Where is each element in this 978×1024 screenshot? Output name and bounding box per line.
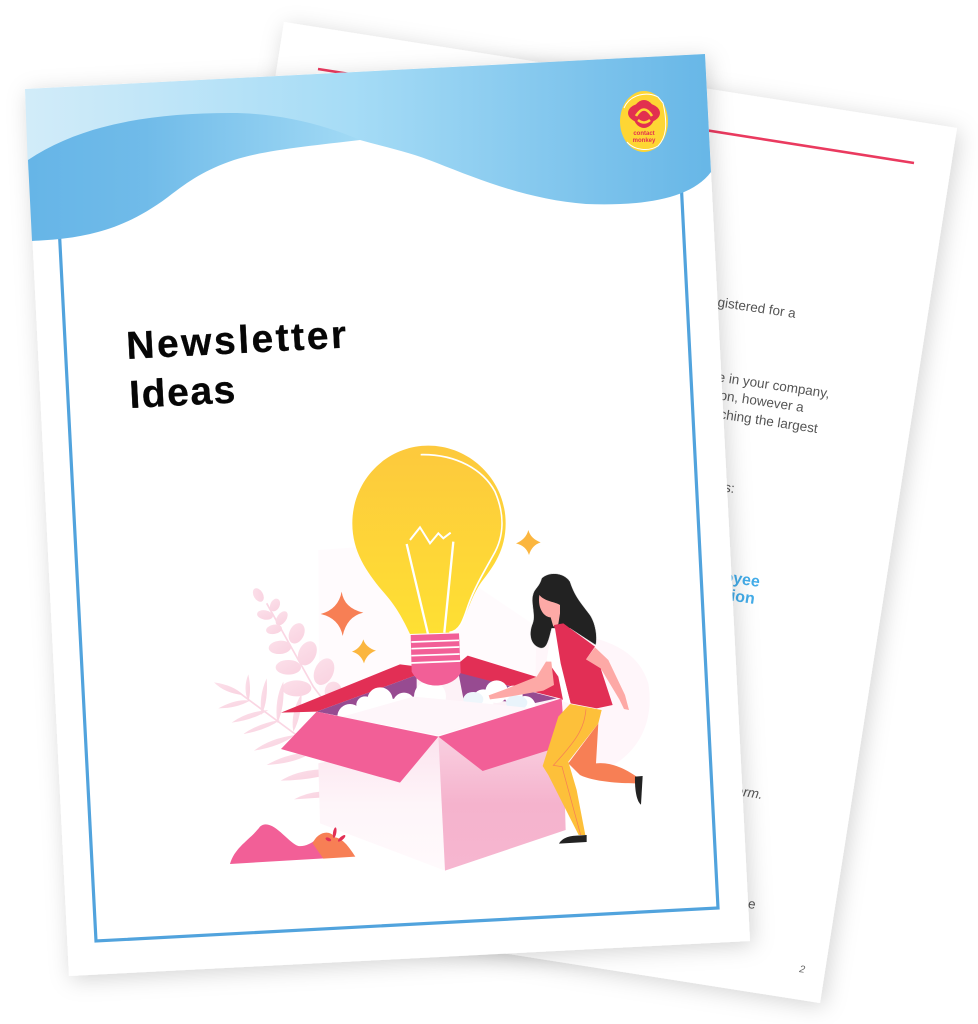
panel: front cover page — [25, 54, 750, 976]
plant leaves — [214, 586, 342, 799]
box right face — [438, 737, 566, 871]
text block: back page paragraphs: reaching the largest — [699, 404, 819, 436]
lightbulb glass — [352, 446, 506, 634]
panel: back page — [147, 22, 957, 1003]
woman: near arm — [489, 662, 554, 699]
box back flaps: red — [281, 664, 417, 713]
woman: shoes — [635, 776, 643, 805]
header rule: back page — [318, 69, 914, 163]
clouds — [337, 680, 536, 729]
heading: back page blue section — [667, 563, 761, 608]
logo: wordmark — [633, 131, 656, 144]
box inner: purple — [317, 675, 417, 716]
woman: shirt — [554, 623, 613, 708]
bulb filament — [407, 527, 453, 634]
logo: contact monkey badge — [620, 91, 668, 152]
cover border frame — [59, 180, 718, 941]
woman figure — [489, 574, 643, 844]
mound with plant — [230, 824, 324, 864]
woman: hair — [530, 574, 596, 648]
background blob — [318, 543, 610, 823]
title: Newsletter — [125, 314, 347, 368]
woman: far arm — [586, 647, 629, 710]
heading: back page blue section: recognition — [667, 578, 756, 608]
box interior — [317, 673, 562, 735]
text block: back page paragraphs: ideas: — [698, 476, 736, 496]
text block: back page paragraphs: You have registered for a — [646, 284, 797, 321]
text block: back page paragraphs: solution, however a — [688, 383, 805, 415]
page number: 2 — [798, 964, 806, 976]
header wave: lower blue wave — [28, 113, 360, 241]
illustration: lightbulb in gift box — [214, 446, 650, 871]
title: Ideas — [128, 368, 236, 417]
woman: back leg — [568, 723, 637, 783]
text block: back page paragraphs: form. — [731, 783, 764, 802]
woman: white top — [547, 628, 571, 704]
text block: back page paragraphs: page — [725, 893, 757, 912]
header wave: light band — [25, 54, 711, 204]
woman: face and neck — [539, 595, 560, 627]
logo: wordmark: contact — [633, 131, 655, 137]
title — [125, 314, 347, 417]
box left face — [318, 737, 445, 871]
text block: back page paragraphs: to everyone in your company, — [654, 360, 831, 401]
logo: wordmark: monkey — [633, 138, 656, 144]
logo: monkey face — [628, 100, 660, 128]
bulb base — [411, 633, 461, 686]
heading: back page blue section: employee — [685, 563, 761, 591]
sparkles — [321, 592, 363, 636]
bulb highlight — [421, 455, 502, 632]
text block: back page paragraphs — [646, 284, 831, 912]
box front flaps — [281, 712, 438, 783]
woman: trousers — [543, 704, 602, 835]
